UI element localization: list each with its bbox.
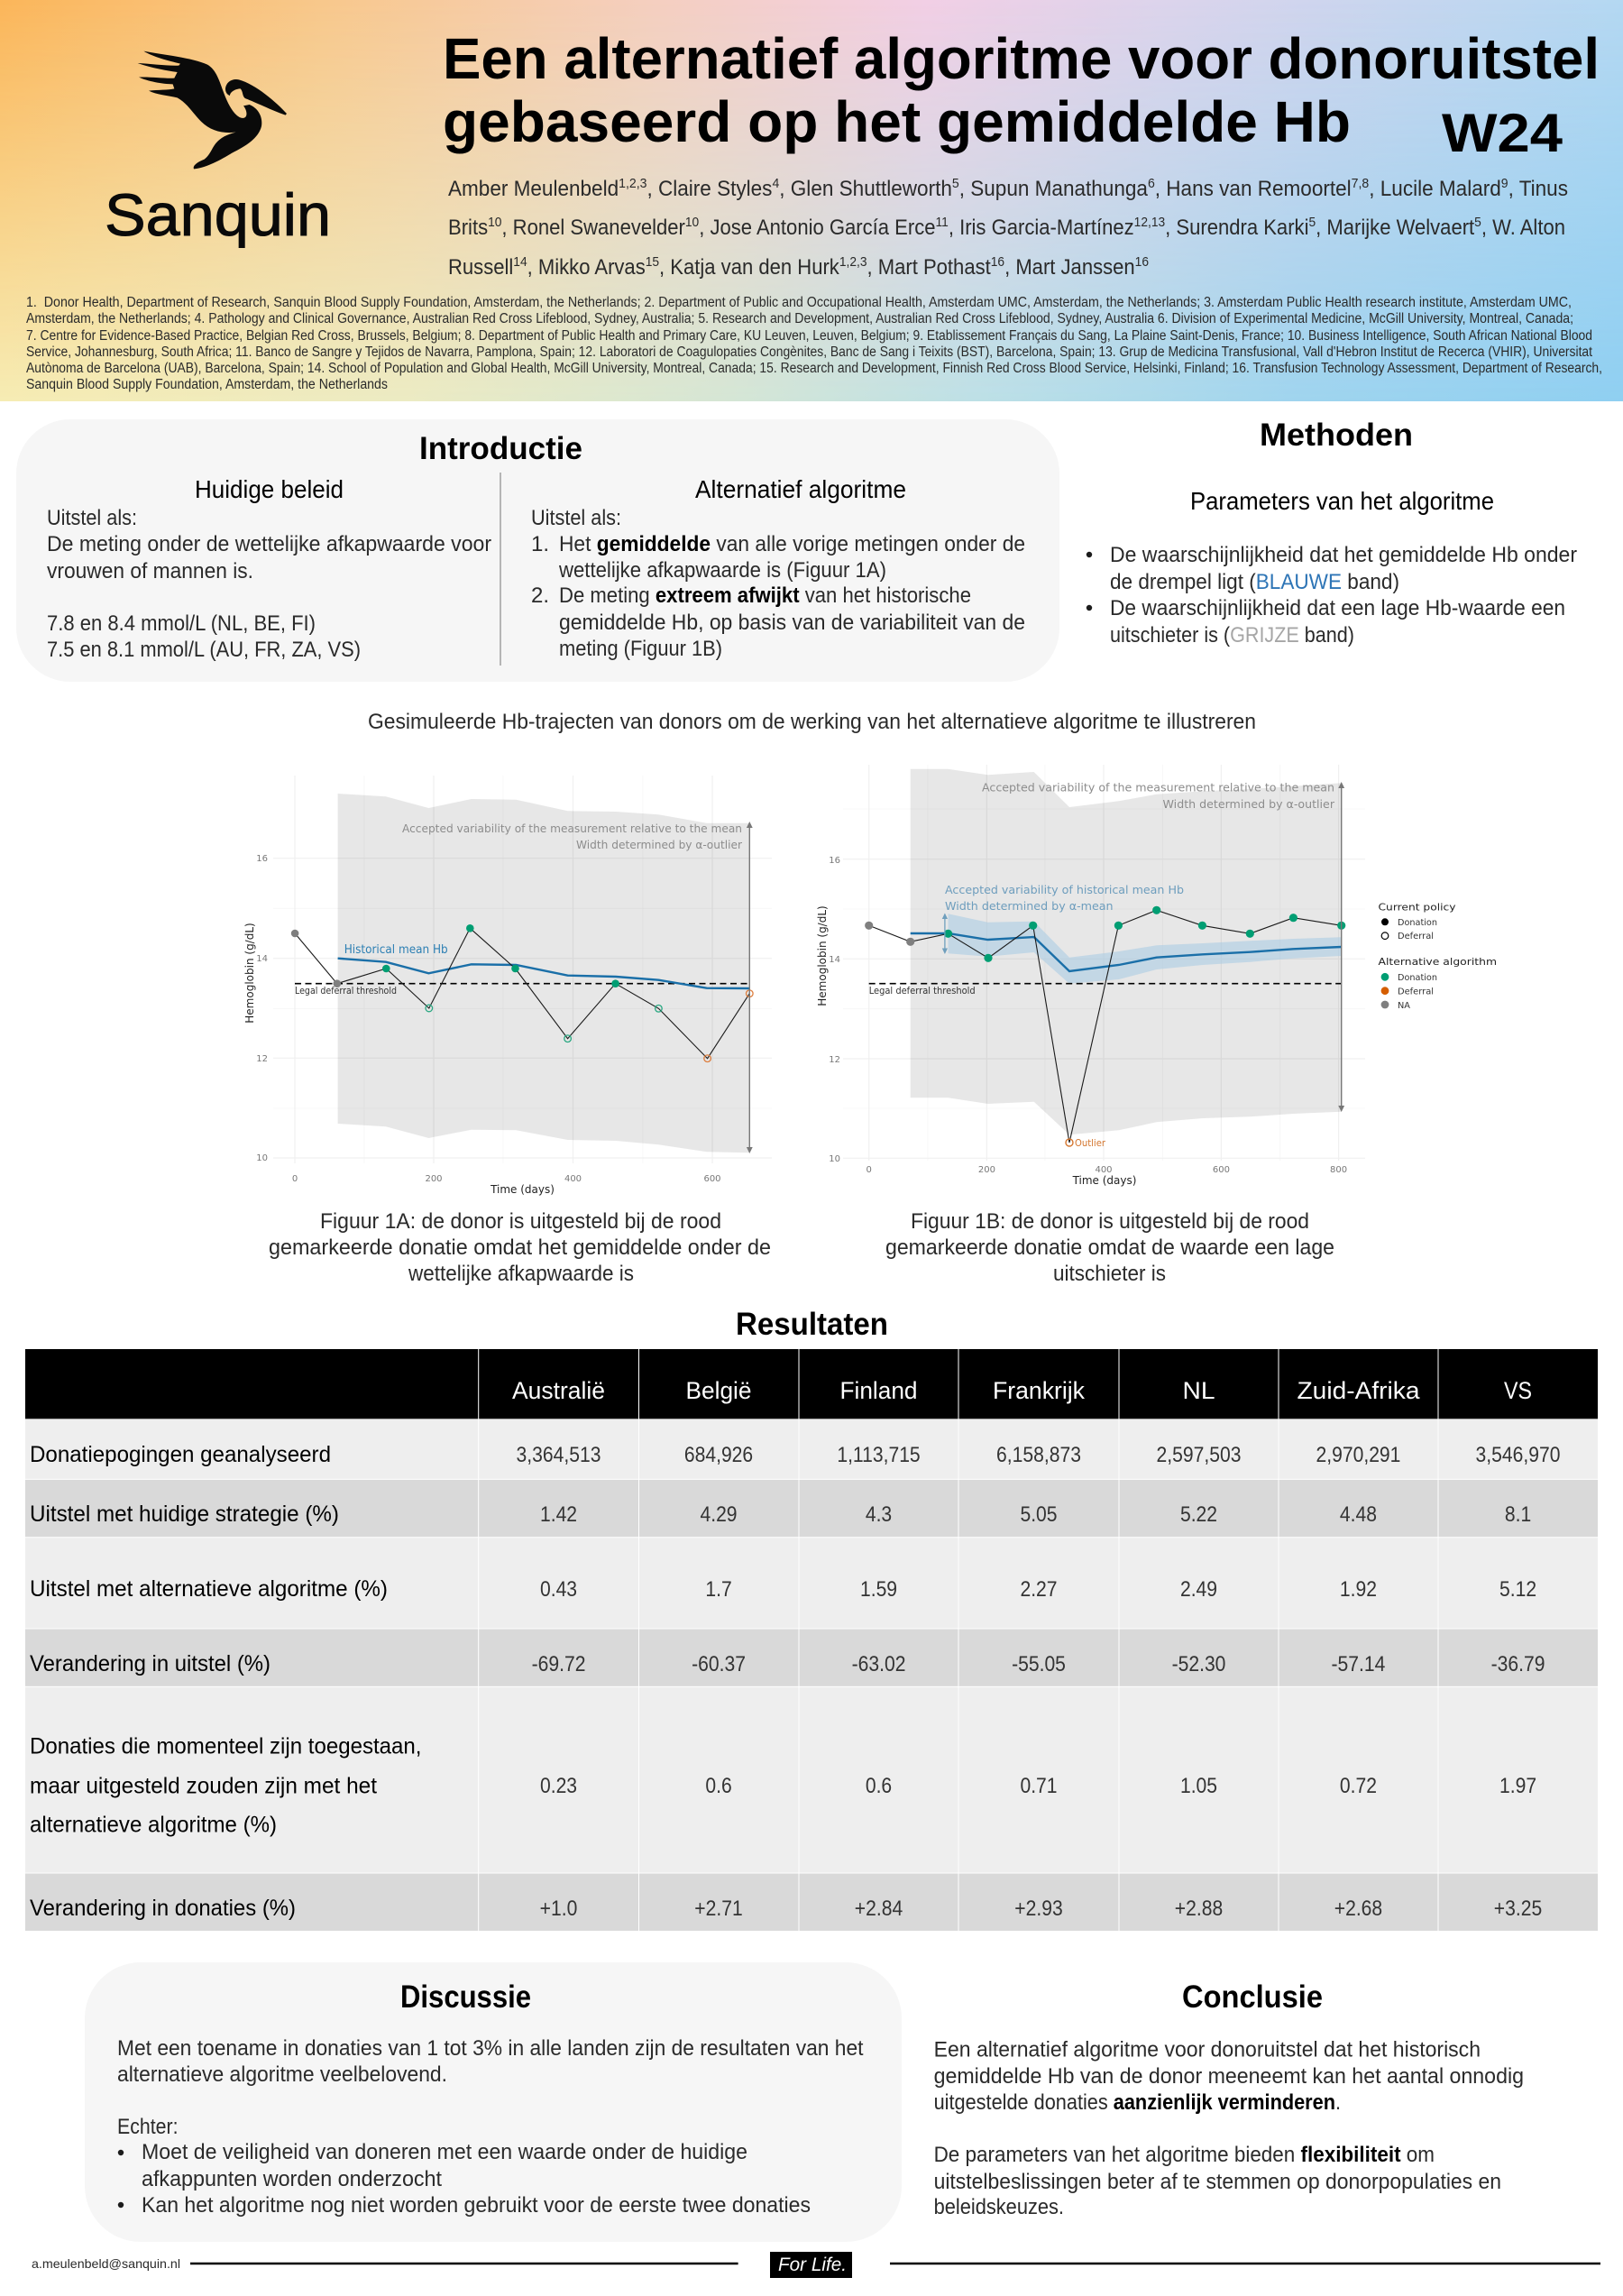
authors: 5	[1308, 215, 1316, 230]
table values: 5.12	[1499, 1577, 1536, 1601]
table values: 2,597,503	[1157, 1443, 1241, 1466]
caption: Figuur 1A: wettelijke afkapwaarde is	[408, 1262, 634, 1286]
tagline box	[770, 2252, 852, 2278]
subheading: Alternatief algoritme: Alternatief algoritme	[695, 475, 906, 503]
authors: , Katja van den Hurk	[659, 255, 840, 280]
table values: +2.84	[855, 1896, 903, 1920]
tagline box: For Life.	[778, 2255, 847, 2275]
trajectory line	[869, 910, 1342, 1143]
axis labels: 12	[829, 1055, 840, 1065]
axis labels: Hemoglobin (g/dL)	[816, 905, 829, 1006]
annotation: mean variability	[945, 884, 1184, 913]
annotation: outlier variability: Accepted variability of the measurement relative to the mean	[982, 781, 1334, 794]
legend: Alternative algorithm	[1378, 956, 1497, 968]
table values: 1.05	[1180, 1774, 1217, 1797]
table values: 0.23	[540, 1774, 577, 1797]
table values: 4.3	[866, 1502, 892, 1526]
annotation: outlier variability	[982, 781, 1334, 811]
text: alternative algorithm: Het gemiddelde van alle vorige metingen onder de	[559, 532, 1025, 556]
row labels: alternatieve algoritme (%)	[30, 1813, 277, 1838]
authors: , Tinus	[1508, 177, 1568, 201]
affiliations: Sanquin Blood Supply Foundation, Amsterdam, the Netherlands	[26, 377, 388, 392]
annotation: outlier variability: Width determined by α-outlier	[1163, 798, 1334, 811]
legend: Donation	[1398, 973, 1437, 983]
heading: Methoden: Methoden	[1260, 418, 1413, 453]
table values: 0.6	[866, 1774, 892, 1797]
text: figure intro: Gesimuleerde Hb-trajecten van donors om de werking van het alternatieve algoritme te illustreren	[368, 710, 1256, 734]
text: discussion: Echter:	[117, 2115, 179, 2139]
annotation: mean variability: Width determined by α-mean	[945, 900, 1114, 913]
table values: -60.37	[692, 1652, 746, 1676]
text: alternative algorithm: gemiddelde Hb, op basis van de variabiliteit van de	[559, 611, 1025, 635]
table values: 1.7	[705, 1577, 732, 1601]
axis labels: 12	[256, 1054, 268, 1064]
authors: , Mart Janssen	[1004, 255, 1135, 280]
authors: , Marijke Welvaert	[1316, 216, 1474, 240]
text: current policy	[47, 506, 491, 662]
axis labels: 10	[256, 1153, 268, 1163]
axis labels: 200	[978, 1165, 995, 1175]
authors: , Ronel Swanevelder	[501, 216, 685, 240]
axis labels: 14	[256, 954, 268, 964]
table values: 1.97	[1499, 1774, 1536, 1797]
table values: 4.48	[1340, 1502, 1377, 1526]
footer	[32, 2252, 1600, 2278]
heading: Resultaten: Resultaten	[736, 1307, 888, 1342]
authors: 7,8	[1352, 176, 1369, 191]
text: discussion: alternatieve algoritme veelbelovend.	[117, 2062, 447, 2087]
panel: Discussie	[85, 1962, 902, 2242]
text: current policy: De meting onder de wettelijke afkapwaarde voor	[47, 532, 491, 556]
authors: , Surendra Karki	[1165, 216, 1308, 240]
table header	[512, 1377, 1532, 1404]
row labels: Donaties die momenteel zijn toegestaan,	[30, 1733, 422, 1759]
authors: , Jose Antonio García Erce	[699, 216, 936, 240]
chart: Figure 1B	[816, 765, 1497, 1187]
text: conclusion: gemiddelde Hb van de donor meeneemt kan het aantal onnodig	[934, 2064, 1524, 2089]
text: conclusion	[934, 2038, 1524, 2219]
data points	[291, 924, 753, 1061]
text: current policy: 7.8 en 8.4 mmol/L (NL, BE, FI)	[47, 611, 316, 636]
threshold line	[295, 983, 749, 985]
caption: Figuur 1B: Figuur 1B: de donor is uitgesteld bij de rood	[911, 1209, 1309, 1234]
annotation: accepted variability: Accepted variability of the measurement relative to the mean	[402, 822, 742, 835]
table values: -63.02	[852, 1652, 905, 1676]
table header: Australië	[512, 1377, 605, 1404]
text: alternative algorithm: meting (Figuur 1B)	[559, 637, 722, 661]
label: legal deferral threshold: Legal deferral threshold	[295, 986, 397, 996]
table values: 3,546,970	[1476, 1443, 1560, 1466]
table values: 5.05	[1020, 1502, 1058, 1526]
legend	[1378, 902, 1497, 1011]
authors: , Iris Garcia-Martínez	[949, 216, 1134, 240]
table values: +2.71	[694, 1896, 743, 1920]
text: current policy: Uitstel als:	[47, 506, 137, 530]
table values	[517, 1443, 1560, 1920]
table values: +2.93	[1014, 1896, 1063, 1920]
table values: 4.29	[700, 1502, 738, 1526]
table values: 1.92	[1340, 1577, 1377, 1601]
legend: Deferral	[1398, 932, 1434, 941]
text: discussion: Moet de veiligheid van doneren met een waarde onder de huidige	[142, 2140, 747, 2164]
table values: -36.79	[1491, 1652, 1545, 1676]
list: algorithm parameters: uitschieter is (GRIJZE band)	[1110, 623, 1354, 647]
contact email: a.meulenbeld@sanquin.nl	[32, 2256, 180, 2271]
table header: België	[685, 1377, 752, 1404]
table values: 1.59	[860, 1577, 897, 1601]
label: historical mean: Historical mean Hb	[344, 943, 448, 957]
icon: Sanquin pelican logo	[138, 51, 287, 169]
heading: Discussie: Discussie	[400, 1979, 531, 2015]
text: conclusion: beleidskeuzes.	[934, 2195, 1064, 2219]
blue band	[949, 914, 1342, 984]
text: alternative algorithm	[531, 506, 1025, 661]
axis labels: 200	[425, 1174, 443, 1184]
text: current policy: vrouwen of mannen is.	[47, 559, 253, 583]
table values: 8.1	[1505, 1502, 1531, 1526]
table values: -55.05	[1012, 1652, 1066, 1676]
axis labels: 10	[829, 1154, 840, 1164]
axis labels: 400	[1095, 1165, 1113, 1175]
text: alternative algorithm: 2.	[531, 583, 549, 608]
legend: Deferral	[1398, 987, 1434, 997]
panel: Introductie	[16, 419, 1059, 682]
table values: 2.27	[1020, 1577, 1058, 1601]
authors: 14	[513, 254, 527, 270]
table header: VS	[1504, 1377, 1532, 1404]
text: discussion: Kan het algoritme nog niet worden gebruikt voor de eerste twee donaties	[142, 2193, 811, 2218]
row labels	[30, 1442, 422, 1921]
table values: 0.71	[1020, 1774, 1058, 1797]
authors: 16	[991, 254, 1004, 270]
table values: 0.43	[540, 1577, 577, 1601]
authors: Brits	[448, 216, 491, 240]
authors: Russell	[448, 255, 519, 280]
annotation: accepted variability: Width determined by α-outlier	[576, 839, 742, 851]
annotation: accepted variability	[402, 822, 742, 851]
row labels: Verandering in donaties (%)	[30, 1896, 296, 1921]
text: alternative algorithm: De meting extreem afwijkt van het historische	[559, 583, 971, 608]
authors: 4	[772, 176, 779, 191]
legend: Donation	[1398, 918, 1437, 928]
subheading: Huidige beleid: Huidige beleid	[195, 475, 344, 503]
authors: 16	[1135, 254, 1149, 270]
table values: -52.30	[1172, 1652, 1225, 1676]
authors	[448, 176, 1568, 280]
authors: , Lucile Malard	[1369, 177, 1501, 201]
row labels: Uitstel met huidige strategie (%)	[30, 1502, 339, 1527]
list: algorithm parameters	[1087, 543, 1577, 647]
table values: 684,926	[684, 1443, 753, 1466]
table values: 3,364,513	[517, 1443, 601, 1466]
caption: Figuur 1A: Figuur 1A: de donor is uitgesteld bij de rood	[320, 1209, 721, 1234]
text: conclusion: uitgestelde donaties aanzienlijk verminderen.	[934, 2090, 1341, 2115]
table header: NL	[1183, 1377, 1215, 1404]
subheading: Parameters van het algoritme: Parameters van het algoritme	[1190, 487, 1494, 515]
authors: 11	[936, 215, 949, 230]
logo wordmark: Sanquin	[105, 181, 331, 248]
list: algorithm parameters: de drempel ligt (BLAUWE band)	[1110, 570, 1399, 594]
table values: 5.22	[1180, 1502, 1217, 1526]
legend: Current policy	[1378, 902, 1456, 913]
table values: -69.72	[532, 1652, 585, 1676]
poster code W24: W24	[1442, 103, 1563, 163]
panel: Conclusie	[934, 1979, 1524, 2219]
authors: , Mikko Arvas	[527, 255, 646, 280]
title: gebaseerd op het gemiddelde Hb	[443, 89, 1351, 154]
text: alternative algorithm: Uitstel als:	[531, 506, 621, 530]
text: discussion: afkappunten worden onderzocht	[142, 2167, 442, 2191]
table values: +3.25	[1494, 1896, 1542, 1920]
legend: NA	[1398, 1001, 1411, 1011]
affiliations	[26, 295, 1602, 392]
axis labels: 0	[867, 1165, 872, 1175]
row labels: Uitstel met alternatieve algoritme (%)	[30, 1576, 388, 1602]
table values: 1.42	[540, 1502, 577, 1526]
axis labels: 800	[1330, 1165, 1347, 1175]
text: discussion: Met een toename in donaties van 1 tot 3% in alle landen zijn de resultaten van het	[117, 2036, 864, 2061]
caption: Figuur 1A	[269, 1209, 771, 1286]
text: discussion	[117, 2036, 864, 2218]
authors: 5	[1474, 215, 1481, 230]
axis labels: 16	[256, 854, 268, 864]
authors: 15	[646, 254, 659, 270]
authors: 12,13	[1134, 215, 1165, 230]
table values: +1.0	[540, 1896, 577, 1920]
text: current policy: 7.5 en 8.1 mmol/L (AU, FR, ZA, VS)	[47, 638, 361, 662]
text: conclusion: De parameters van het algoritme bieden flexibiliteit om	[934, 2143, 1435, 2167]
table values: -57.14	[1332, 1652, 1385, 1676]
caption: Figuur 1B: gemarkeerde donatie omdat de waarde een lage	[885, 1235, 1334, 1260]
table values: 0.72	[1340, 1774, 1377, 1797]
list: algorithm parameters: De waarschijnlijkheid dat een lage Hb-waarde een	[1110, 596, 1565, 620]
table values: 0.6	[705, 1774, 732, 1797]
panel: header banner	[0, 0, 1623, 401]
authors: , Claire Styles	[646, 177, 772, 201]
title	[443, 26, 1600, 154]
threshold line	[869, 983, 1342, 985]
trajectory line	[295, 928, 749, 1059]
chart: Figure 1A	[243, 776, 772, 1196]
authors: 1,2,3	[839, 254, 867, 270]
authors: 9	[1501, 176, 1508, 191]
table values: 1,113,715	[837, 1443, 921, 1466]
text: alternative algorithm: 1.	[531, 532, 549, 556]
table values: 2.49	[1180, 1577, 1217, 1601]
heading: Introductie: Introductie	[419, 431, 582, 466]
axis labels: Hemoglobin (g/dL)	[243, 923, 256, 1024]
table values: 2,970,291	[1316, 1443, 1400, 1466]
axis labels	[243, 854, 721, 1196]
authors: , Supun Manathunga	[959, 177, 1149, 201]
panel: Methoden	[1087, 418, 1577, 647]
table values: +2.68	[1334, 1896, 1382, 1920]
text: alternative algorithm: wettelijke afkapwaarde is (Figuur 1A)	[558, 558, 886, 583]
table: results	[25, 1349, 1598, 1931]
text: conclusion: uitstelbeslissingen beter af te stemmen op donorpopulaties en	[934, 2170, 1501, 2194]
arrow: outlier width	[1338, 782, 1344, 1112]
table header: Zuid-Afrika	[1297, 1377, 1421, 1404]
row labels: Donatiepogingen geanalyseerd	[30, 1442, 331, 1467]
label: outlier: Outlier	[1075, 1138, 1106, 1149]
axis labels	[816, 856, 1347, 1187]
table values: 6,158,873	[996, 1443, 1081, 1466]
authors: , Hans van Remoortel	[1155, 177, 1352, 201]
authors: , W. Alton	[1481, 216, 1565, 240]
axis labels: Time (days)	[1072, 1174, 1136, 1187]
title: Een alternatief algoritme voor donoruitstel	[443, 26, 1600, 91]
axis labels: 600	[703, 1174, 721, 1184]
authors: 5	[952, 176, 959, 191]
authors: 10	[685, 215, 699, 230]
row labels: Verandering in uitstel (%)	[30, 1651, 270, 1676]
caption: Figuur 1A: gemarkeerde donatie omdat het gemiddelde onder de	[269, 1235, 771, 1260]
authors: 6	[1148, 176, 1155, 191]
data points	[865, 906, 1345, 1146]
historical mean line	[338, 959, 749, 988]
axis labels: 14	[829, 955, 840, 965]
historical mean line	[911, 933, 1342, 971]
row labels: maar uitgesteld zouden zijn met het	[30, 1774, 377, 1799]
axis labels: 0	[292, 1174, 298, 1184]
list: algorithm parameters: De waarschijnlijkheid dat het gemiddelde Hb onder	[1110, 543, 1577, 567]
table values: +2.88	[1175, 1896, 1223, 1920]
label: legal deferral threshold: Legal deferral threshold	[869, 986, 976, 996]
caption: Figuur 1B	[885, 1209, 1334, 1286]
table header: Finland	[840, 1377, 918, 1404]
axis labels: 600	[1213, 1165, 1230, 1175]
authors: Amber Meulenbeld	[448, 177, 629, 201]
axis labels: Time (days)	[490, 1183, 555, 1196]
authors: , Glen Shuttleworth	[779, 177, 952, 201]
authors: , Mart Pothast	[867, 255, 991, 280]
axis labels: 400	[564, 1174, 582, 1184]
caption: Figuur 1B: uitschieter is	[1053, 1262, 1166, 1286]
annotation: mean variability: Accepted variability of historical mean Hb	[945, 884, 1184, 896]
arrow: outlier width	[747, 822, 753, 1153]
authors: 1,2,3	[619, 176, 646, 191]
authors: 10	[488, 215, 501, 230]
heading: Conclusie: Conclusie	[1182, 1979, 1323, 2015]
arrow: mean width	[942, 913, 948, 954]
table header: Frankrijk	[993, 1377, 1085, 1404]
axis labels: 16	[829, 856, 840, 866]
text: conclusion: Een alternatief algoritme voor donoruitstel dat het historisch	[934, 2038, 1481, 2062]
